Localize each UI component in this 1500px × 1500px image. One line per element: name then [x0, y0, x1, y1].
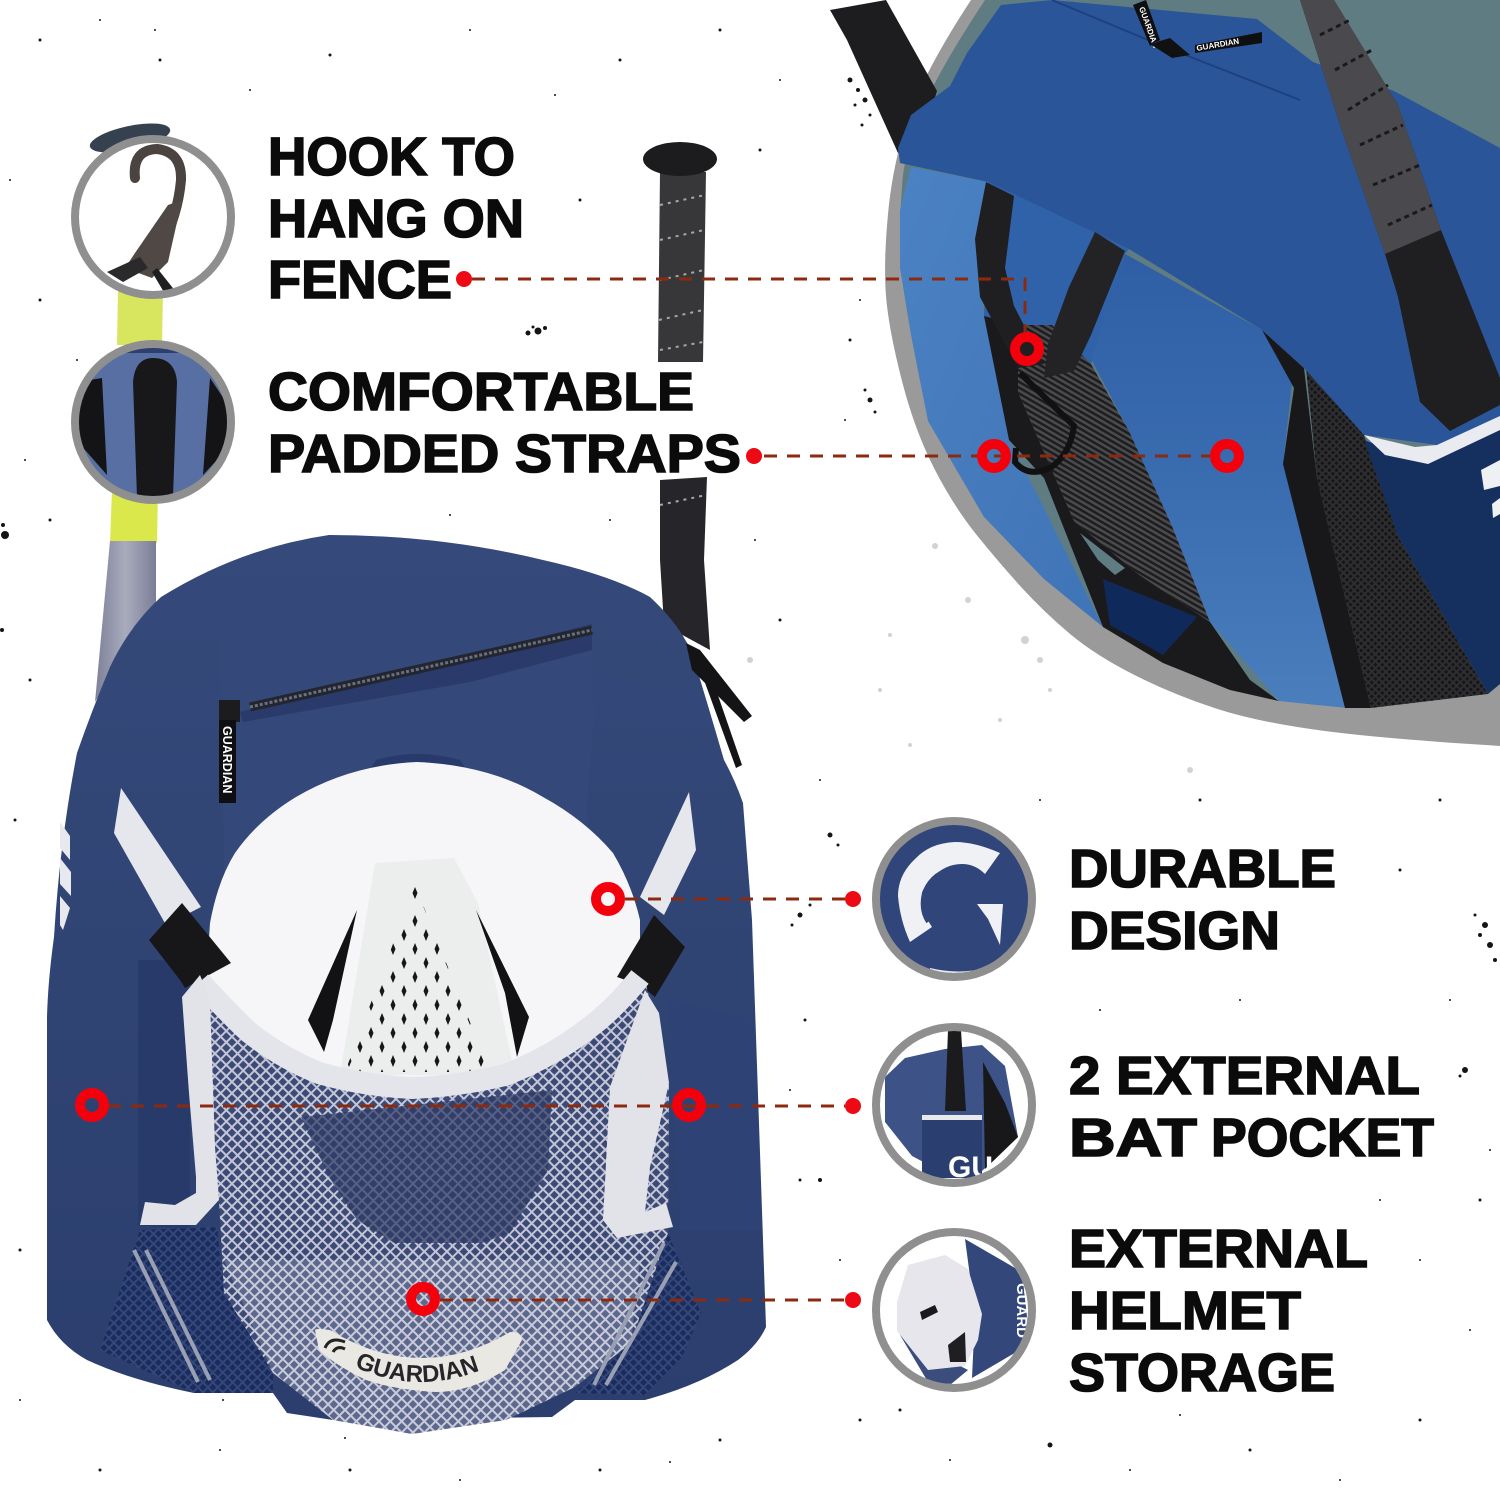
side zipper pulls: [686, 643, 752, 768]
backpack illustration: [47, 535, 766, 1434]
mesh helmet pocket: [200, 980, 669, 1434]
lower strap pocket: [1103, 579, 1197, 655]
bat: left yellow grip and grey barrel: [95, 290, 163, 702]
center blue strap: [1091, 254, 1347, 708]
heading: external helmet storage: HELMET: [1069, 1281, 1301, 1341]
teal gap: [1080, 533, 1125, 575]
blue pack top: [898, 0, 1500, 445]
strap black edge: [1262, 330, 1371, 708]
left webbing: [140, 975, 219, 1225]
heading: external helmet storage: STORAGE: [1069, 1343, 1335, 1403]
heading: external helmet storage: EXTERNAL: [1069, 1219, 1368, 1279]
grip dashes: [1320, 20, 1432, 225]
right side mesh: [575, 1233, 701, 1395]
heading: hook to hang on fence: [268, 127, 524, 310]
feature circle: bat pocket: GU: [948, 1151, 993, 1184]
bat: right black with grip tape: [643, 142, 717, 650]
left side mesh: [100, 1227, 273, 1393]
grey ring: [885, 0, 1500, 746]
dark navy bat pocket: [1364, 430, 1500, 694]
feature circle: helmet storage: [876, 1232, 1032, 1388]
heading: comfortable padded straps: PADDED STRAPS: [268, 424, 741, 484]
hanging strap left: [975, 182, 1044, 368]
right webbing: [603, 990, 673, 1238]
zipper tag vertical: GUARDIAN: [1137, 6, 1160, 49]
right mesh panel: [1306, 368, 1488, 708]
zipper tag horizontal: GUARDIAN: [1196, 37, 1240, 53]
pocket zipper: [240, 624, 592, 722]
side mesh stripes: [134, 1243, 676, 1385]
zoomed backpack circle: [830, 0, 1500, 746]
zipper pull GUARDIAN tag: [219, 700, 240, 803]
GUARDIAN logo patch: [315, 1329, 522, 1392]
helmet shadow through mesh: [301, 1090, 552, 1243]
teal background: [900, 0, 1500, 706]
hanging strap right: [1044, 232, 1125, 378]
mesh lower light fade: [224, 1260, 640, 1434]
feature circle: hook: [75, 118, 231, 295]
blue panel between hanging straps: [984, 182, 1129, 364]
zipper pull GUARDIAN tag: GUARDIAN: [220, 726, 234, 793]
callout lines with markers: [80, 271, 1239, 1311]
heading: comfortable padded straps: COMFORTABLE: [268, 362, 694, 422]
GUARDIAN logo patch: GUARDIAN: [357, 1354, 478, 1382]
heading: 2 external bat pocket: BAT: [1069, 1108, 1197, 1168]
light blue left panel: [900, 167, 1103, 627]
heading: durable design: DURABLE: [1069, 839, 1336, 899]
metal hook: [1015, 373, 1074, 472]
front pocket panel: [219, 608, 594, 900]
heading: durable design: [1069, 839, 1336, 961]
feature circle: bat pocket: [876, 1027, 1032, 1184]
heading: hook to hang on fence: FENCE: [268, 250, 452, 310]
white side print: [60, 822, 71, 930]
seam on pack top: [1052, 0, 1300, 100]
white pocket trim: [1364, 416, 1500, 464]
upper left bat: [830, 0, 937, 153]
white straps: [114, 788, 696, 925]
heading: 2 external bat pocket: POCKET: [1211, 1108, 1434, 1168]
heading: comfortable padded straps: [268, 362, 741, 484]
helmet: [206, 754, 640, 1090]
heading: external helmet storage: [1069, 1219, 1368, 1403]
heading: durable design: DESIGN: [1069, 901, 1280, 961]
buckles: [149, 903, 685, 997]
background grey splatter: [747, 543, 1193, 773]
heading: 2 external bat pocket: 2 EXTERNAL: [1069, 1046, 1420, 1106]
white letter on pocket: [1481, 460, 1500, 518]
feature circle: durable design logo: [876, 821, 1032, 977]
backpack body: [47, 535, 766, 1420]
right side shading: [669, 1000, 762, 1230]
heading: hook to hang on fence: HOOK TO: [268, 127, 515, 187]
feature circle: padded straps: [75, 344, 231, 500]
bat in pocket: [1300, 0, 1500, 431]
feature circle: helmet storage: GUARD: [1013, 1283, 1030, 1338]
bat grip tape: [1300, 0, 1441, 254]
zipper tag horizontal: [1150, 32, 1262, 58]
ribbed mesh strap: [1018, 325, 1210, 622]
heading: hook to hang on fence: HANG ON: [268, 189, 524, 249]
side pocket shading: [138, 960, 190, 1230]
black back edging: [984, 316, 1279, 701]
heading: 2 external bat pocket: [1069, 1046, 1434, 1168]
mesh top binding: [200, 977, 640, 1088]
